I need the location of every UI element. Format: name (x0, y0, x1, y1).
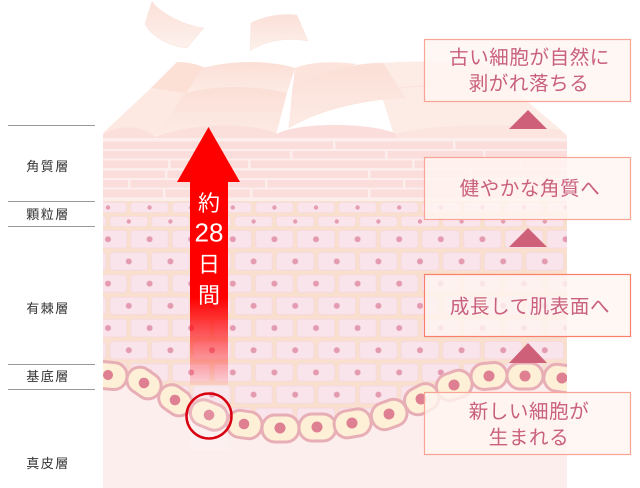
layer labels: 基底層 (26, 369, 70, 384)
callout: new cells born: 新しい細胞が (469, 401, 589, 423)
arrow: 28 days: 日 (198, 252, 220, 277)
highlight circle (186, 394, 232, 438)
skin surface flakes (103, 61, 567, 139)
layer labels: 真皮層 (26, 456, 70, 471)
callout: new cells born (424, 392, 630, 454)
dermis (103, 374, 567, 488)
arrow triangle 1 (509, 110, 547, 129)
arrow: 28 days (177, 127, 240, 450)
panel: skin base (103, 138, 567, 488)
arrow triangle 2 (509, 228, 547, 247)
callout: old cells shed (424, 40, 630, 102)
layer labels: 有棘層 (26, 301, 70, 316)
callout: old cells shed: 古い細胞が自然に (449, 47, 610, 69)
falling flakes (145, 1, 308, 51)
layer labels: 角質層 (26, 159, 70, 174)
layer labels (8, 126, 95, 471)
callout: to skin surface (424, 274, 630, 336)
arrow triangle 3 (509, 343, 547, 363)
basal cells (88, 360, 582, 442)
spinous and granular cell layers (103, 201, 567, 431)
stratum corneum bricks (103, 141, 567, 198)
arrow: 28 days: 間 (198, 283, 220, 308)
callout: to skin surface: 成長して肌表面へ (450, 296, 610, 318)
callout: new cells born: 生まれる (489, 427, 569, 449)
layer labels: 顆粒層 (26, 207, 70, 222)
arrow: 28 days: 約 (198, 191, 220, 216)
callout: healthy corneum: 健やかな角質へ (460, 178, 600, 200)
arrow: 28 days: 28 (195, 218, 223, 248)
callout: healthy corneum (424, 158, 630, 220)
callout: old cells shed: 剥がれ落ちる (469, 73, 589, 95)
